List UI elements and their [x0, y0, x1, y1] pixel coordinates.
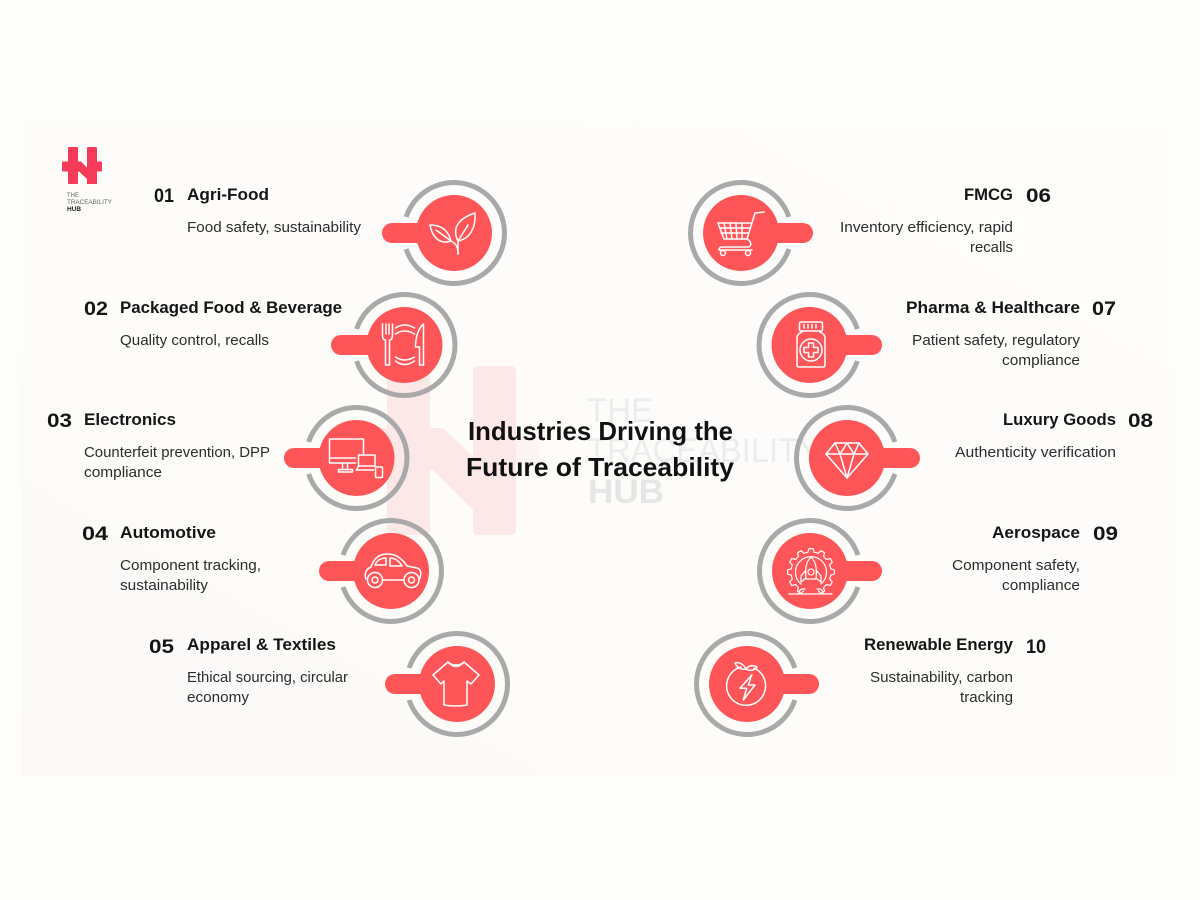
description — [187, 670, 348, 706]
description — [840, 220, 1013, 256]
description: Food safety, sustainability — [187, 220, 362, 236]
description: Component tracking, — [120, 558, 261, 574]
number 02: 02 — [84, 298, 108, 320]
node: t-shirt icon — [385, 634, 507, 734]
logo mark — [62, 147, 102, 184]
description: sustainability — [120, 578, 209, 594]
title: Industries Driving the — [468, 416, 733, 446]
description: compliance — [84, 465, 162, 481]
node: plate icon — [331, 294, 455, 396]
heading: Packaged Food & Beverage — [120, 299, 342, 317]
number 08: 08 — [1128, 410, 1153, 432]
node: rocket gear icon — [760, 520, 882, 622]
heading: Pharma & Healthcare — [906, 299, 1080, 317]
watermark logo — [365, 366, 540, 535]
heading: Aerospace — [992, 524, 1080, 542]
description: compliance — [1002, 353, 1080, 369]
item 08: Luxury Goods — [797, 408, 1153, 508]
heading: Agri-Food — [187, 186, 269, 204]
description: Patient safety, regulatory — [912, 333, 1081, 349]
item 06: FMCG — [691, 182, 1051, 284]
number 03: 03 — [47, 410, 72, 432]
description: Inventory efficiency, rapid — [840, 220, 1013, 236]
logo wordmark — [67, 193, 112, 213]
heading: Luxury Goods — [1003, 411, 1116, 429]
heading: Electronics — [84, 411, 176, 429]
item 10: Renewable Energy — [697, 634, 1046, 734]
item 07: Pharma & Healthcare — [759, 294, 1116, 396]
description — [84, 445, 270, 481]
heading: Renewable Energy — [864, 636, 1014, 654]
description: Counterfeit prevention, DPP — [84, 445, 270, 461]
description — [912, 333, 1081, 369]
node: medicine bottle icon — [759, 294, 882, 396]
node: cart icon — [691, 182, 813, 284]
item 03: Electronics — [47, 408, 407, 508]
number 07: 07 — [1092, 298, 1116, 320]
description: Authenticity verification — [955, 445, 1116, 461]
logo wordmark: HUB — [67, 207, 82, 213]
item 02: Packaged Food & Beverage — [84, 294, 455, 396]
description: tracking — [960, 690, 1013, 706]
node: diamond icon — [797, 408, 920, 508]
item 04: Automotive — [82, 520, 441, 622]
description: Quality control, recalls — [120, 333, 269, 349]
node: leaf icon — [382, 182, 504, 284]
description: compliance — [1002, 578, 1080, 594]
number 05: 05 — [149, 636, 174, 658]
node: devices icon — [284, 408, 407, 508]
heading: Apparel & Textiles — [187, 636, 336, 654]
description — [120, 558, 261, 594]
description — [870, 670, 1013, 706]
description: economy — [187, 690, 250, 706]
node: energy icon — [697, 634, 819, 734]
item 05: Apparel & Textiles — [149, 634, 507, 734]
description: Sustainability, carbon — [870, 670, 1013, 686]
watermark wordmark — [587, 392, 820, 511]
number 10: 10 — [1026, 636, 1046, 658]
item 01: Agri-Food — [154, 182, 504, 284]
watermark wordmark: TRACEABILITY — [587, 432, 820, 470]
description: recalls — [970, 240, 1013, 256]
description: Component safety, — [952, 558, 1080, 574]
heading: Automotive — [120, 524, 216, 542]
node: car icon — [319, 520, 441, 622]
number 09: 09 — [1093, 523, 1118, 545]
item 09: Aerospace — [760, 520, 1118, 622]
number 04: 04 — [82, 523, 108, 545]
watermark wordmark: HUB — [588, 473, 664, 511]
heading: FMCG — [964, 186, 1013, 204]
logo — [62, 147, 112, 213]
description: Ethical sourcing, circular — [187, 670, 348, 686]
title: Future of Traceability — [466, 452, 735, 482]
description — [952, 558, 1080, 594]
logo wordmark: THE — [67, 193, 79, 199]
number 06: 06 — [1026, 185, 1051, 207]
watermark wordmark: THE — [587, 392, 653, 430]
title — [466, 416, 735, 482]
logo wordmark: TRACEABILITY — [67, 200, 112, 206]
inner panel — [22, 124, 1178, 776]
number 01: 01 — [154, 185, 174, 207]
